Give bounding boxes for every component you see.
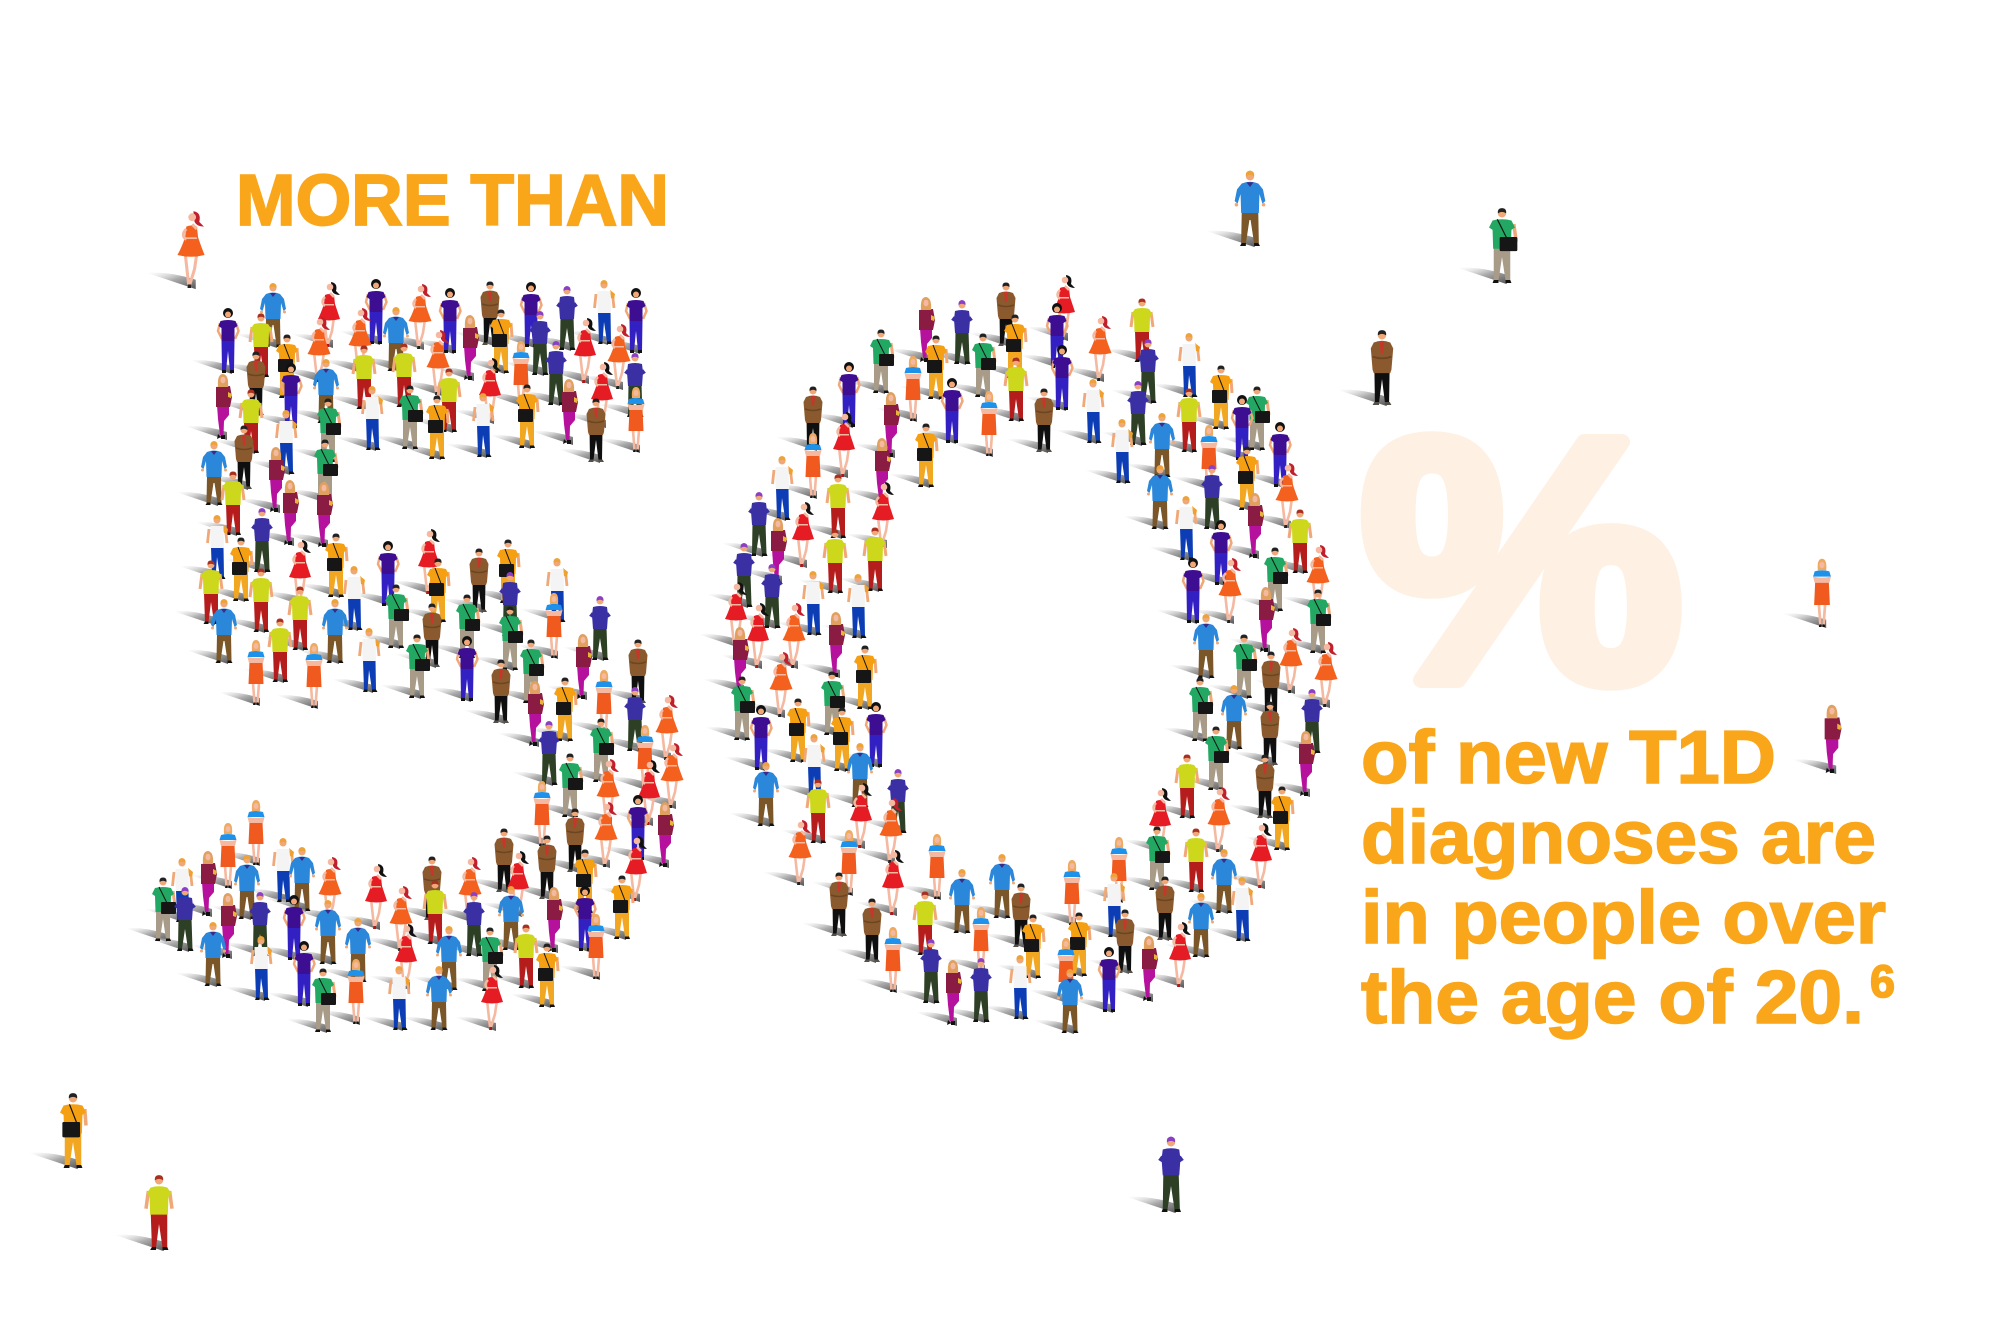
person: maroon top woman, right: [1792, 705, 1841, 774]
person: brown jacket man: [1337, 330, 1393, 406]
crowd forming the numeral 0: [698, 275, 1338, 1034]
statement text: of new T1D: [1361, 715, 1776, 799]
statement text: diagnoses are: [1361, 795, 1876, 879]
person: green tee man, top right: [1457, 208, 1517, 284]
person: indigo tee man, bottom: [1126, 1136, 1182, 1213]
statement text: in people over: [1361, 875, 1886, 959]
statement text: the age of 20.: [1361, 955, 1864, 1039]
person: orange tee man, bottom left: [28, 1093, 86, 1169]
person: orange dress woman, top left: [146, 211, 205, 289]
statement text: 6: [1870, 956, 1895, 1007]
large pale percent sign: %: [1360, 368, 1683, 754]
crowd forming the numeral 5: [125, 279, 684, 1033]
statement text: [1361, 715, 1895, 1039]
person: blue top woman, right: [1782, 559, 1831, 628]
heading: more than: MORE THAN: [236, 161, 669, 241]
stray people scattered around the numerals: [28, 170, 1841, 1251]
person: yellow tee man, bottom left: [114, 1175, 172, 1251]
person: blue jacket man, top: [1205, 170, 1265, 247]
